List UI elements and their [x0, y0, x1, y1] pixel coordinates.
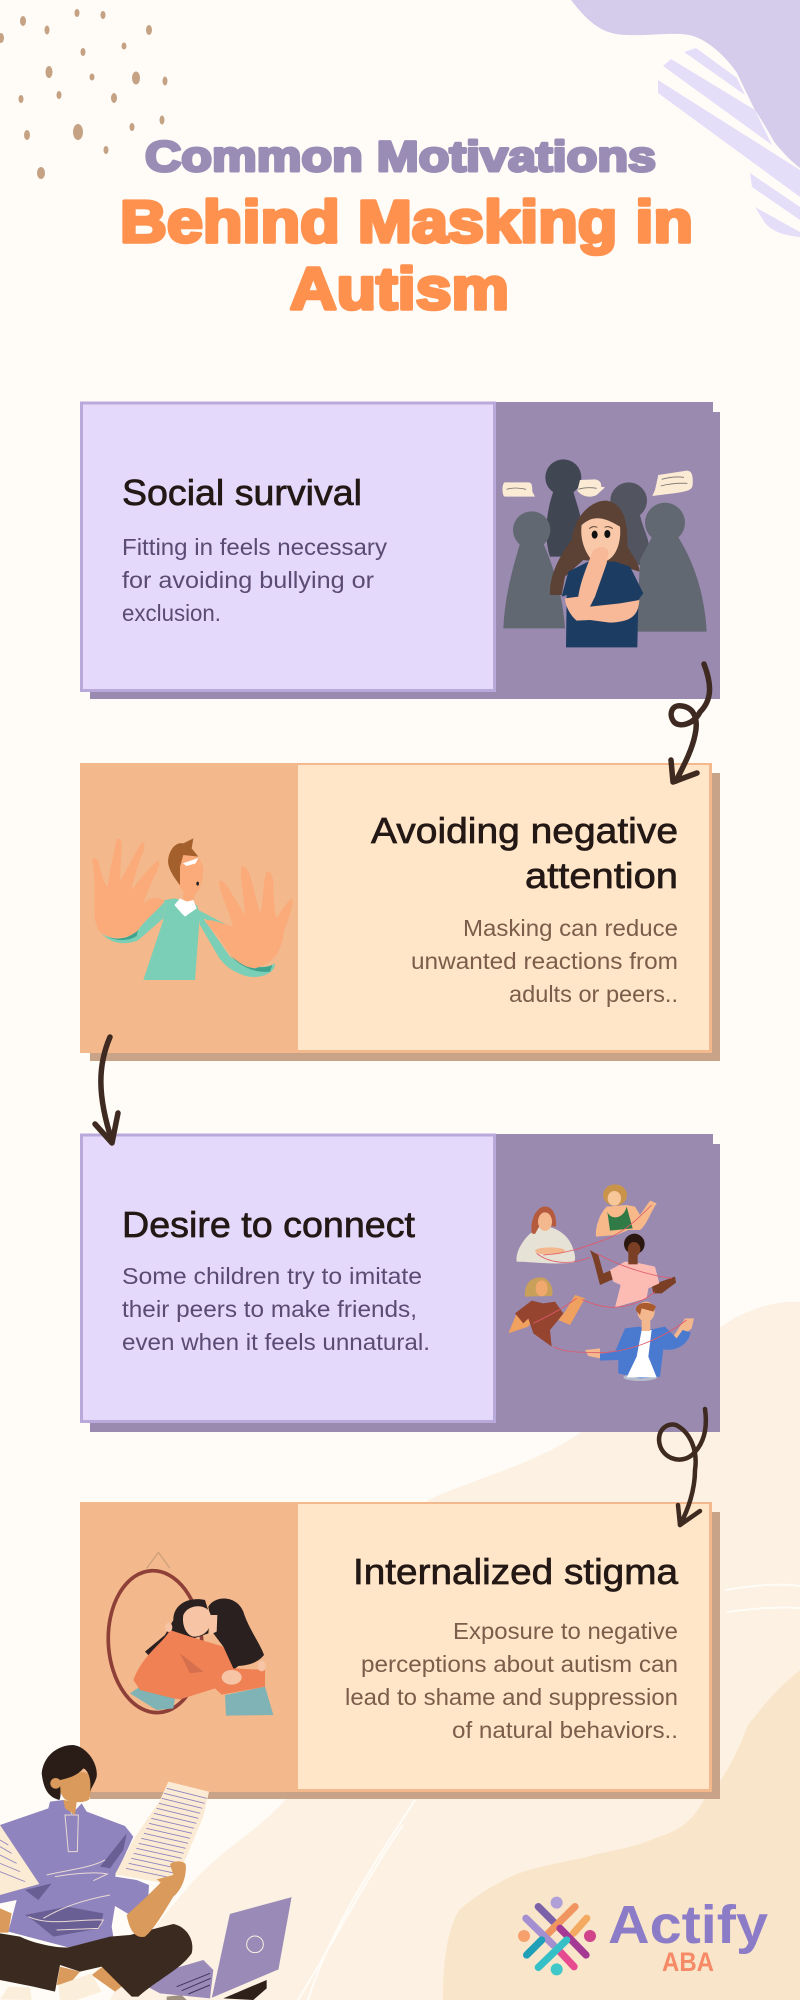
heading: attention — [525, 855, 678, 896]
logo wordmark: Actify — [608, 1895, 768, 1955]
body text: perceptions about autism can — [361, 1651, 678, 1677]
body text: of natural behaviors.. — [452, 1717, 678, 1743]
background: top right lavender blob with stripes — [571, 0, 800, 237]
body text: Masking can reduce — [463, 915, 678, 941]
body text: exclusion. — [122, 600, 221, 626]
body text — [345, 1618, 678, 1743]
body text: adults or peers.. — [509, 981, 678, 1007]
heading: Desire to connect — [122, 1204, 415, 1245]
body text: Some children try to imitate — [122, 1263, 422, 1289]
icon: woven logo mark — [518, 1897, 596, 1975]
heading: Internalized stigma — [353, 1551, 679, 1592]
title line 1: Common Motivations — [145, 133, 656, 181]
heading: Social survival — [122, 472, 362, 513]
body text: even when it feels unnatural. — [122, 1329, 430, 1355]
background: bottom blobs — [110, 1302, 800, 2000]
body text: Exposure to negative — [453, 1618, 678, 1644]
body text: unwanted reactions from — [411, 948, 678, 974]
decorative dots top left — [0, 9, 168, 179]
panel: avoiding negative attention — [80, 763, 720, 1061]
heading — [371, 810, 678, 896]
panel: desire to connect — [82, 1134, 720, 1432]
body text: their peers to make friends, — [122, 1296, 417, 1322]
title line 2: Behind Masking in — [120, 189, 693, 255]
body text — [122, 1263, 430, 1355]
body text — [411, 915, 678, 1007]
body text: lead to shame and suppression — [345, 1684, 678, 1710]
title line 3: Autism — [290, 256, 509, 322]
arrow: social survival to avoiding negative attention — [671, 664, 710, 782]
paper left — [0, 1825, 39, 1895]
icon: anxious girl among silhouettes — [502, 459, 707, 647]
panel: internalized stigma — [80, 1502, 720, 1799]
heading: Avoiding negative — [371, 810, 678, 851]
body text: for avoiding bullying or — [122, 567, 374, 593]
logo: Actify ABA — [518, 1895, 768, 1977]
arrow: desire to connect to internalized stigma — [659, 1409, 706, 1525]
panel: social survival — [82, 402, 720, 699]
illustration: man reading papers beside a laptop — [0, 1745, 292, 2000]
body text — [122, 534, 388, 626]
title — [120, 133, 693, 322]
icon: girl hugging herself in a mirror — [105, 1552, 273, 1716]
paper right — [115, 1782, 209, 1885]
arrow: avoiding negative attention to desire to connect — [95, 1037, 118, 1143]
logo subtitle: ABA — [662, 1947, 714, 1977]
body text: Fitting in feels necessary — [122, 534, 388, 560]
icon: man with raised hands — [92, 838, 293, 980]
icon: five people joined by a red string — [508, 1184, 694, 1381]
laptop — [135, 1897, 292, 2000]
